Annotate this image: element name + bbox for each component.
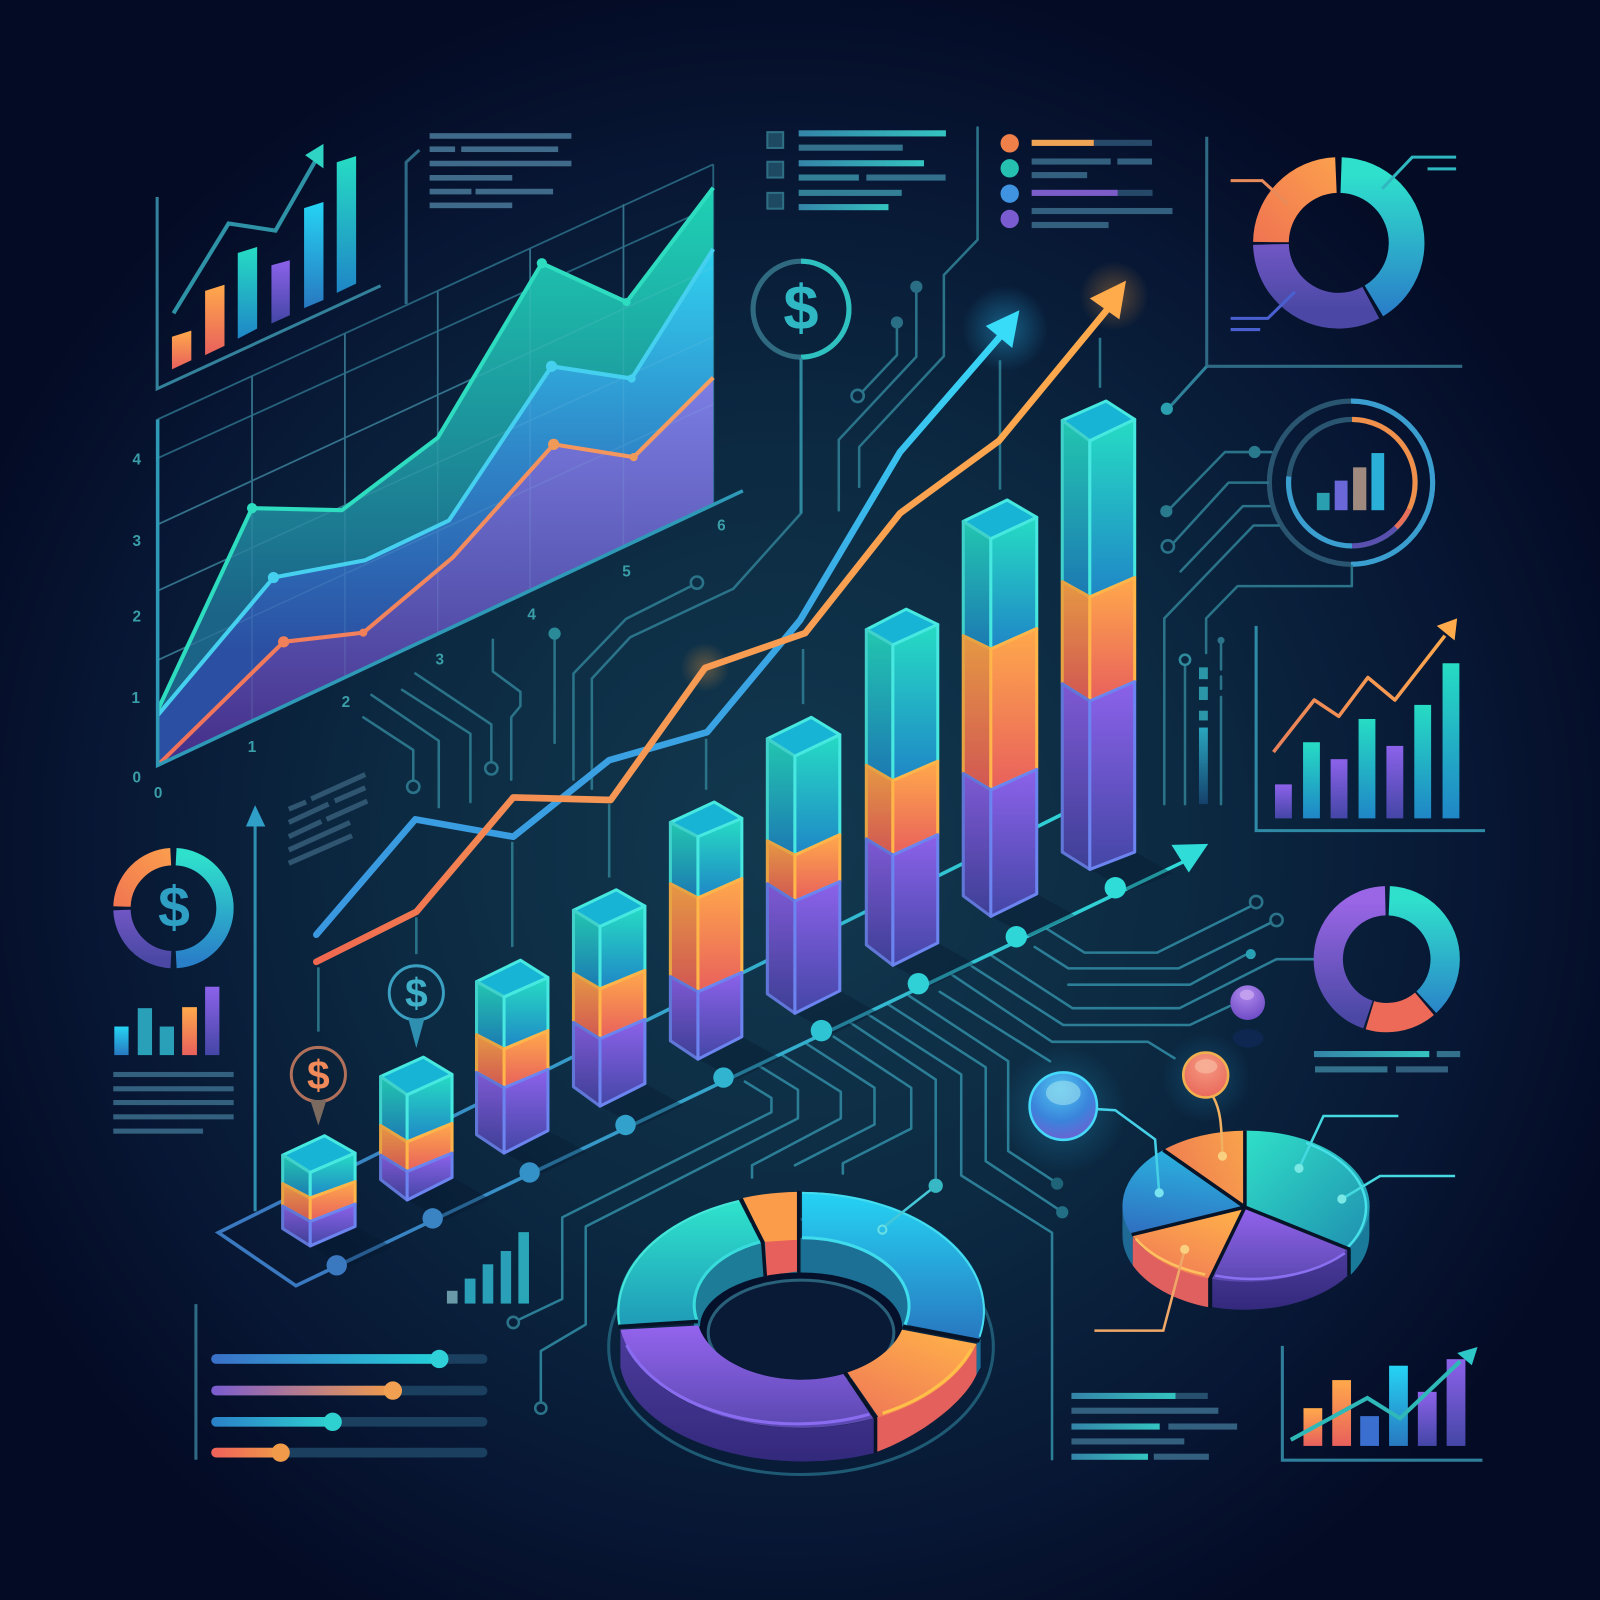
- y axis arrow: trend chart: [246, 805, 265, 1211]
- growth line: blue arrow: [316, 310, 1019, 935]
- donut with dollar icon: [122, 857, 225, 960]
- teal line: [158, 188, 713, 710]
- bar shadows: [310, 852, 1173, 1267]
- blue side wall: [977, 1339, 981, 1374]
- sphere and callout: blue: [1000, 1047, 1164, 1197]
- mini bar chart: top left: [157, 144, 381, 389]
- chart grid: [158, 164, 713, 720]
- red side wall: [877, 1344, 977, 1452]
- bar chart: bottom right: [1282, 1346, 1482, 1460]
- donut chart: top right: [1231, 157, 1456, 330]
- x axis numbers: 2: [342, 694, 350, 711]
- stacked isometric bars: [283, 401, 1135, 1246]
- bar 1: [283, 1136, 355, 1246]
- sphere and callout: orange: [1161, 1033, 1251, 1161]
- x axis numbers: [154, 518, 726, 802]
- blue segment: [802, 1192, 985, 1339]
- slider 3: [211, 1413, 487, 1431]
- teal wedge: [1245, 1131, 1370, 1248]
- dollar pin: blue: $: [405, 970, 428, 1016]
- orange wedge: [1132, 1206, 1245, 1279]
- y axis numbers: 2: [132, 608, 141, 625]
- blue side: [1122, 1206, 1133, 1265]
- rim highlights: [1136, 1143, 1366, 1279]
- circuit lines: right of centre: [1160, 446, 1352, 804]
- y axis numbers: 0: [132, 770, 141, 787]
- bar 5: [670, 802, 742, 1059]
- ascending small bars: [447, 1232, 529, 1304]
- blue wedge: [1122, 1150, 1245, 1235]
- donut with dollar icon: $: [158, 876, 190, 940]
- glow accents: [681, 261, 1149, 692]
- circuit lines: top centre: [839, 128, 978, 510]
- bar 6: [767, 717, 840, 1013]
- panel frame: top right donut: [1161, 137, 1462, 415]
- pie callout lines: [1094, 1116, 1455, 1331]
- donut chart: right: [1328, 901, 1445, 1018]
- blue area: [158, 249, 713, 765]
- slider bars: [196, 1304, 487, 1462]
- bar 8: [963, 500, 1037, 916]
- 3D donut chart: centre bottom: [609, 1191, 993, 1474]
- sphere: purple: [1230, 985, 1265, 1048]
- donut callout line: [878, 1179, 943, 1234]
- axis markers: [327, 877, 1126, 1276]
- red side: [1133, 1237, 1208, 1307]
- teal area: [158, 188, 713, 765]
- y axis numbers: 3: [132, 533, 141, 550]
- grid overlay: [158, 204, 713, 720]
- slider 4: [211, 1443, 487, 1462]
- legend list: colour dots: [1001, 134, 1172, 228]
- x axis numbers: 1: [248, 739, 257, 756]
- slider 1: [211, 1350, 487, 1368]
- small bar chart: left: [114, 987, 219, 1055]
- text block: bottom right: [1071, 1393, 1237, 1460]
- dollar circle icon: [753, 261, 849, 513]
- platform and axis arrow: [218, 814, 1208, 1286]
- x axis numbers: 6: [717, 518, 726, 535]
- dollar pin: orange: $: [307, 1052, 330, 1098]
- x axis numbers: 5: [622, 564, 631, 581]
- legend list: square bullets: [767, 130, 946, 210]
- bar 7: [866, 609, 938, 965]
- vertical guide lines: [318, 338, 1100, 1032]
- orange line: [158, 378, 713, 765]
- text block: left: [113, 1072, 234, 1134]
- purple wedge: [1210, 1206, 1349, 1282]
- x axis numbers: 3: [436, 651, 444, 668]
- segment gaps: [618, 1191, 980, 1453]
- purple segment: [620, 1326, 873, 1428]
- blue line: [158, 249, 713, 715]
- bar 4: [573, 890, 645, 1106]
- teal side: [1350, 1206, 1369, 1276]
- bar 3: [477, 960, 548, 1153]
- wedge gaps: [1132, 1131, 1349, 1308]
- y axis numbers: 1: [131, 690, 140, 707]
- bar chart with orange trend arrow: [1256, 618, 1485, 831]
- y axis numbers: 4: [132, 451, 141, 468]
- dollar circle icon: $: [783, 274, 819, 344]
- dollar pin: orange: [291, 1047, 345, 1126]
- orange bottom segment: [847, 1330, 977, 1417]
- dollar pin: blue: [389, 966, 443, 1048]
- slider 2: [211, 1381, 487, 1400]
- rim highlights: [618, 1193, 984, 1424]
- bar 9: [1062, 401, 1135, 869]
- 3D pie chart: bottom right: [1122, 1131, 1370, 1310]
- small diagonal text block: [289, 774, 367, 863]
- y axis numbers: [131, 451, 141, 787]
- data points: [247, 258, 638, 647]
- x axis numbers: 4: [527, 606, 536, 623]
- area chart: layered growth: [131, 164, 743, 802]
- growth line: orange arrow: [316, 281, 1126, 962]
- teal segment: [617, 1200, 760, 1327]
- text block: top left notes: [406, 133, 571, 304]
- callout lines: [1231, 157, 1456, 330]
- text block: under right donut: [1314, 1051, 1460, 1072]
- axes: [158, 419, 743, 765]
- circuit lines: under trend axis: [508, 896, 1313, 1459]
- ring gauge with bars: [1269, 401, 1433, 564]
- purple area: [158, 378, 713, 765]
- outer ring: [609, 1219, 993, 1474]
- circuit lines: centre left: [363, 513, 801, 807]
- inner walls and hole: [694, 1238, 908, 1385]
- bar 2: [381, 1057, 452, 1200]
- orange top segment: [743, 1192, 797, 1242]
- x axis numbers: 0: [154, 785, 162, 802]
- purple side: [1212, 1247, 1348, 1310]
- orange top wedge: [1163, 1131, 1246, 1206]
- purple side wall: [620, 1330, 874, 1461]
